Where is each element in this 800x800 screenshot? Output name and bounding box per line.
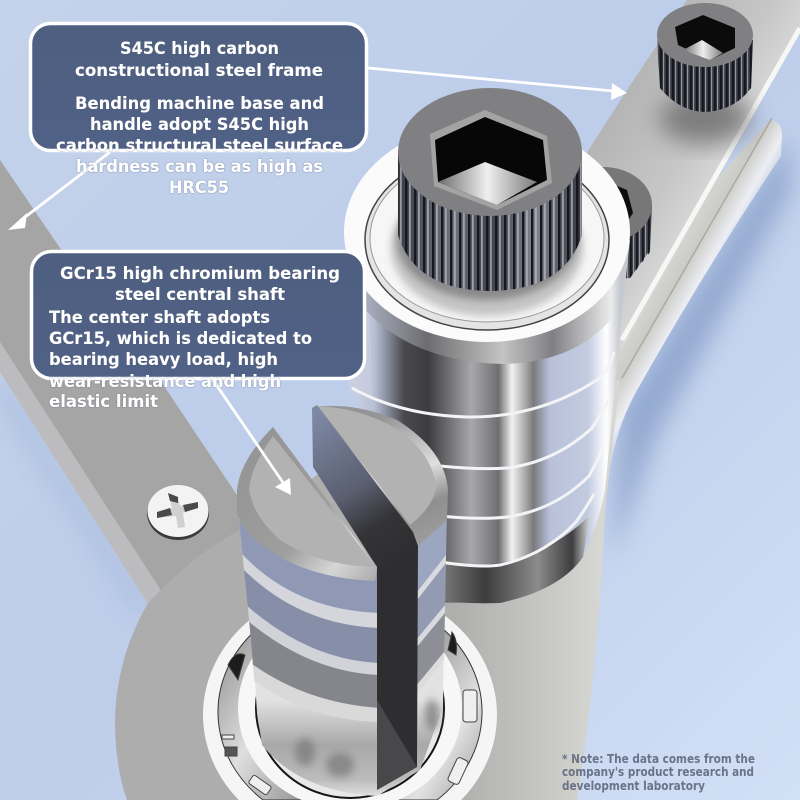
panel: steel frame callout: [30, 24, 366, 150]
cylinder body: [348, 240, 630, 603]
panel: central shaft callout: [32, 252, 364, 378]
base disc: [115, 380, 620, 800]
top small screw: [657, 3, 753, 144]
text block: steel frame description: [56, 94, 343, 198]
panel box: [32, 252, 364, 378]
text block: central shaft description: The center shaft adopts: [49, 308, 270, 328]
arm highlight edge: [622, 28, 800, 340]
cap right half face: [318, 406, 436, 525]
bright reflection rings: [352, 352, 614, 566]
cap left half face: [249, 436, 376, 567]
main knurled screw: [398, 88, 582, 291]
footnote: * Note: The data comes from the: [562, 751, 755, 766]
hex socket: [675, 15, 735, 60]
knurled side: [398, 150, 582, 291]
bearing ring: [365, 150, 609, 330]
front slotted shaft: [230, 405, 448, 796]
left arm of frame: [0, 160, 240, 604]
text block: central shaft description: elastic limit: [49, 392, 158, 412]
shaft seat line: [256, 618, 444, 798]
panel box: [30, 24, 366, 150]
callout arrow: frame to right arm: [368, 68, 627, 100]
text block: central shaft description: [49, 308, 312, 412]
arm top surface: [0, 160, 240, 592]
left half striped bands: [230, 520, 380, 722]
cap right half bevel: [313, 405, 448, 546]
right arm of frame: [540, 0, 800, 567]
heading: steel central shaft: [115, 285, 285, 305]
white washer: [344, 122, 630, 342]
heading: GCr15 high chromium bearing: [60, 264, 340, 284]
arm top surface: [540, 0, 800, 350]
main silver cylinder: [344, 122, 630, 603]
outer white ring: [203, 585, 497, 800]
back screw: [554, 167, 652, 280]
drop shadows on background: [0, 135, 790, 612]
socket floor cone: [438, 162, 537, 205]
footnote: development laboratory: [562, 778, 705, 793]
text block: steel frame description: carbon structural steel surface: [56, 136, 343, 156]
footnote: [562, 751, 755, 793]
callout arrow: frame to left arm: [8, 152, 110, 230]
roller bearings: [222, 632, 477, 795]
cap left half bevel: [237, 427, 377, 581]
top lip band: [362, 280, 612, 364]
silver lower shaft and patches: [250, 520, 445, 796]
dark slot wall: [312, 405, 418, 790]
hex socket bevel: [430, 110, 552, 210]
hex socket: [590, 175, 633, 222]
text block: steel frame description: Bending machine base and: [75, 94, 324, 114]
text block: steel frame description: hardness can be as high as: [76, 157, 323, 177]
arm bevel: [0, 342, 162, 604]
text block: central shaft description: bearing heavy load, high: [49, 350, 278, 370]
lower plate: [560, 120, 782, 567]
callout arrow: shaft to cap: [213, 380, 291, 495]
heading: [75, 39, 323, 81]
lower bearing: [203, 585, 497, 800]
dark bottom section: [440, 515, 590, 603]
text block: central shaft description: GCr15, which is dedicated to: [49, 329, 312, 349]
text block: steel frame description: handle adopt S45C high: [90, 115, 309, 135]
heading: [60, 264, 340, 305]
hex socket: [435, 117, 547, 205]
text block: central shaft description: wear-resistance and high: [49, 372, 281, 392]
screw top face: [398, 88, 582, 216]
heading: S45C high carbon: [120, 39, 279, 59]
right half bands: [417, 510, 447, 592]
icon: cross-head screw: [147, 485, 209, 540]
heading: constructional steel frame: [75, 61, 323, 81]
inner white ring: [238, 606, 462, 800]
footnote: company's product research and: [562, 764, 754, 779]
text block: steel frame description: HRC55: [169, 178, 229, 198]
chrome race: [218, 595, 482, 800]
